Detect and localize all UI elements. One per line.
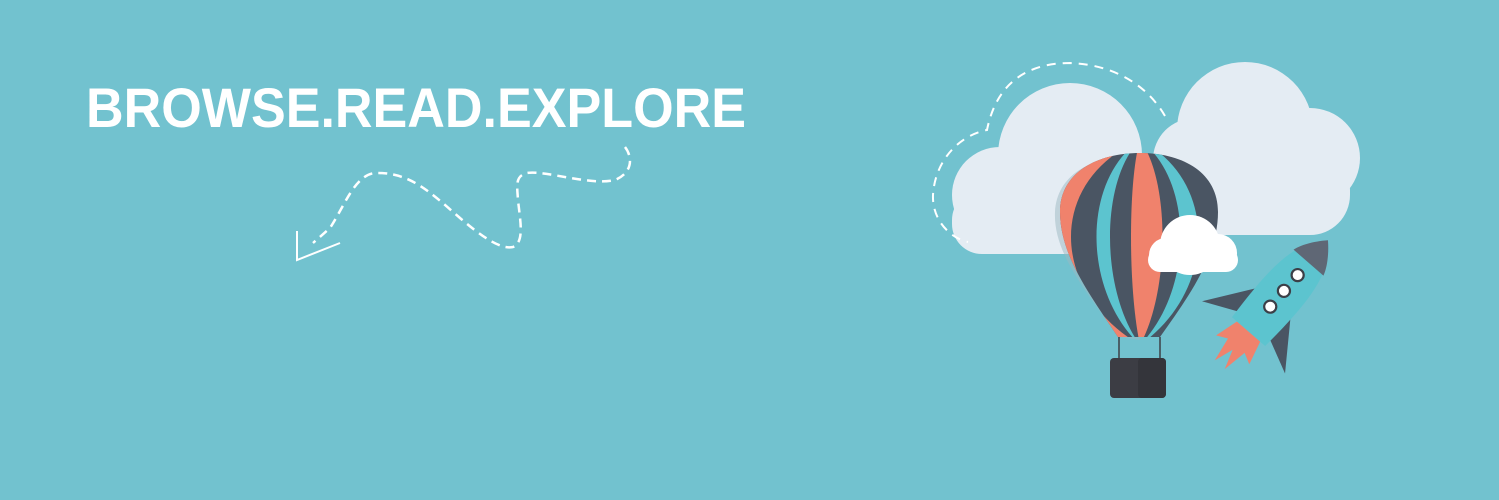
fins xyxy=(1202,264,1261,324)
flame xyxy=(1203,317,1265,379)
hot air balloon xyxy=(1055,153,1218,398)
cloud dashed trail xyxy=(933,63,1165,242)
small white cloud xyxy=(1148,215,1238,275)
arrow: dashed wavy xyxy=(297,147,630,260)
title: BROWSE.READ.EXPLORE xyxy=(86,76,746,139)
balloon shadow xyxy=(1055,155,1140,340)
clouds: large background xyxy=(952,62,1360,265)
body xyxy=(1231,225,1346,347)
windows xyxy=(1262,267,1306,315)
rocket xyxy=(1178,204,1369,401)
ropes and basket xyxy=(1119,337,1160,360)
